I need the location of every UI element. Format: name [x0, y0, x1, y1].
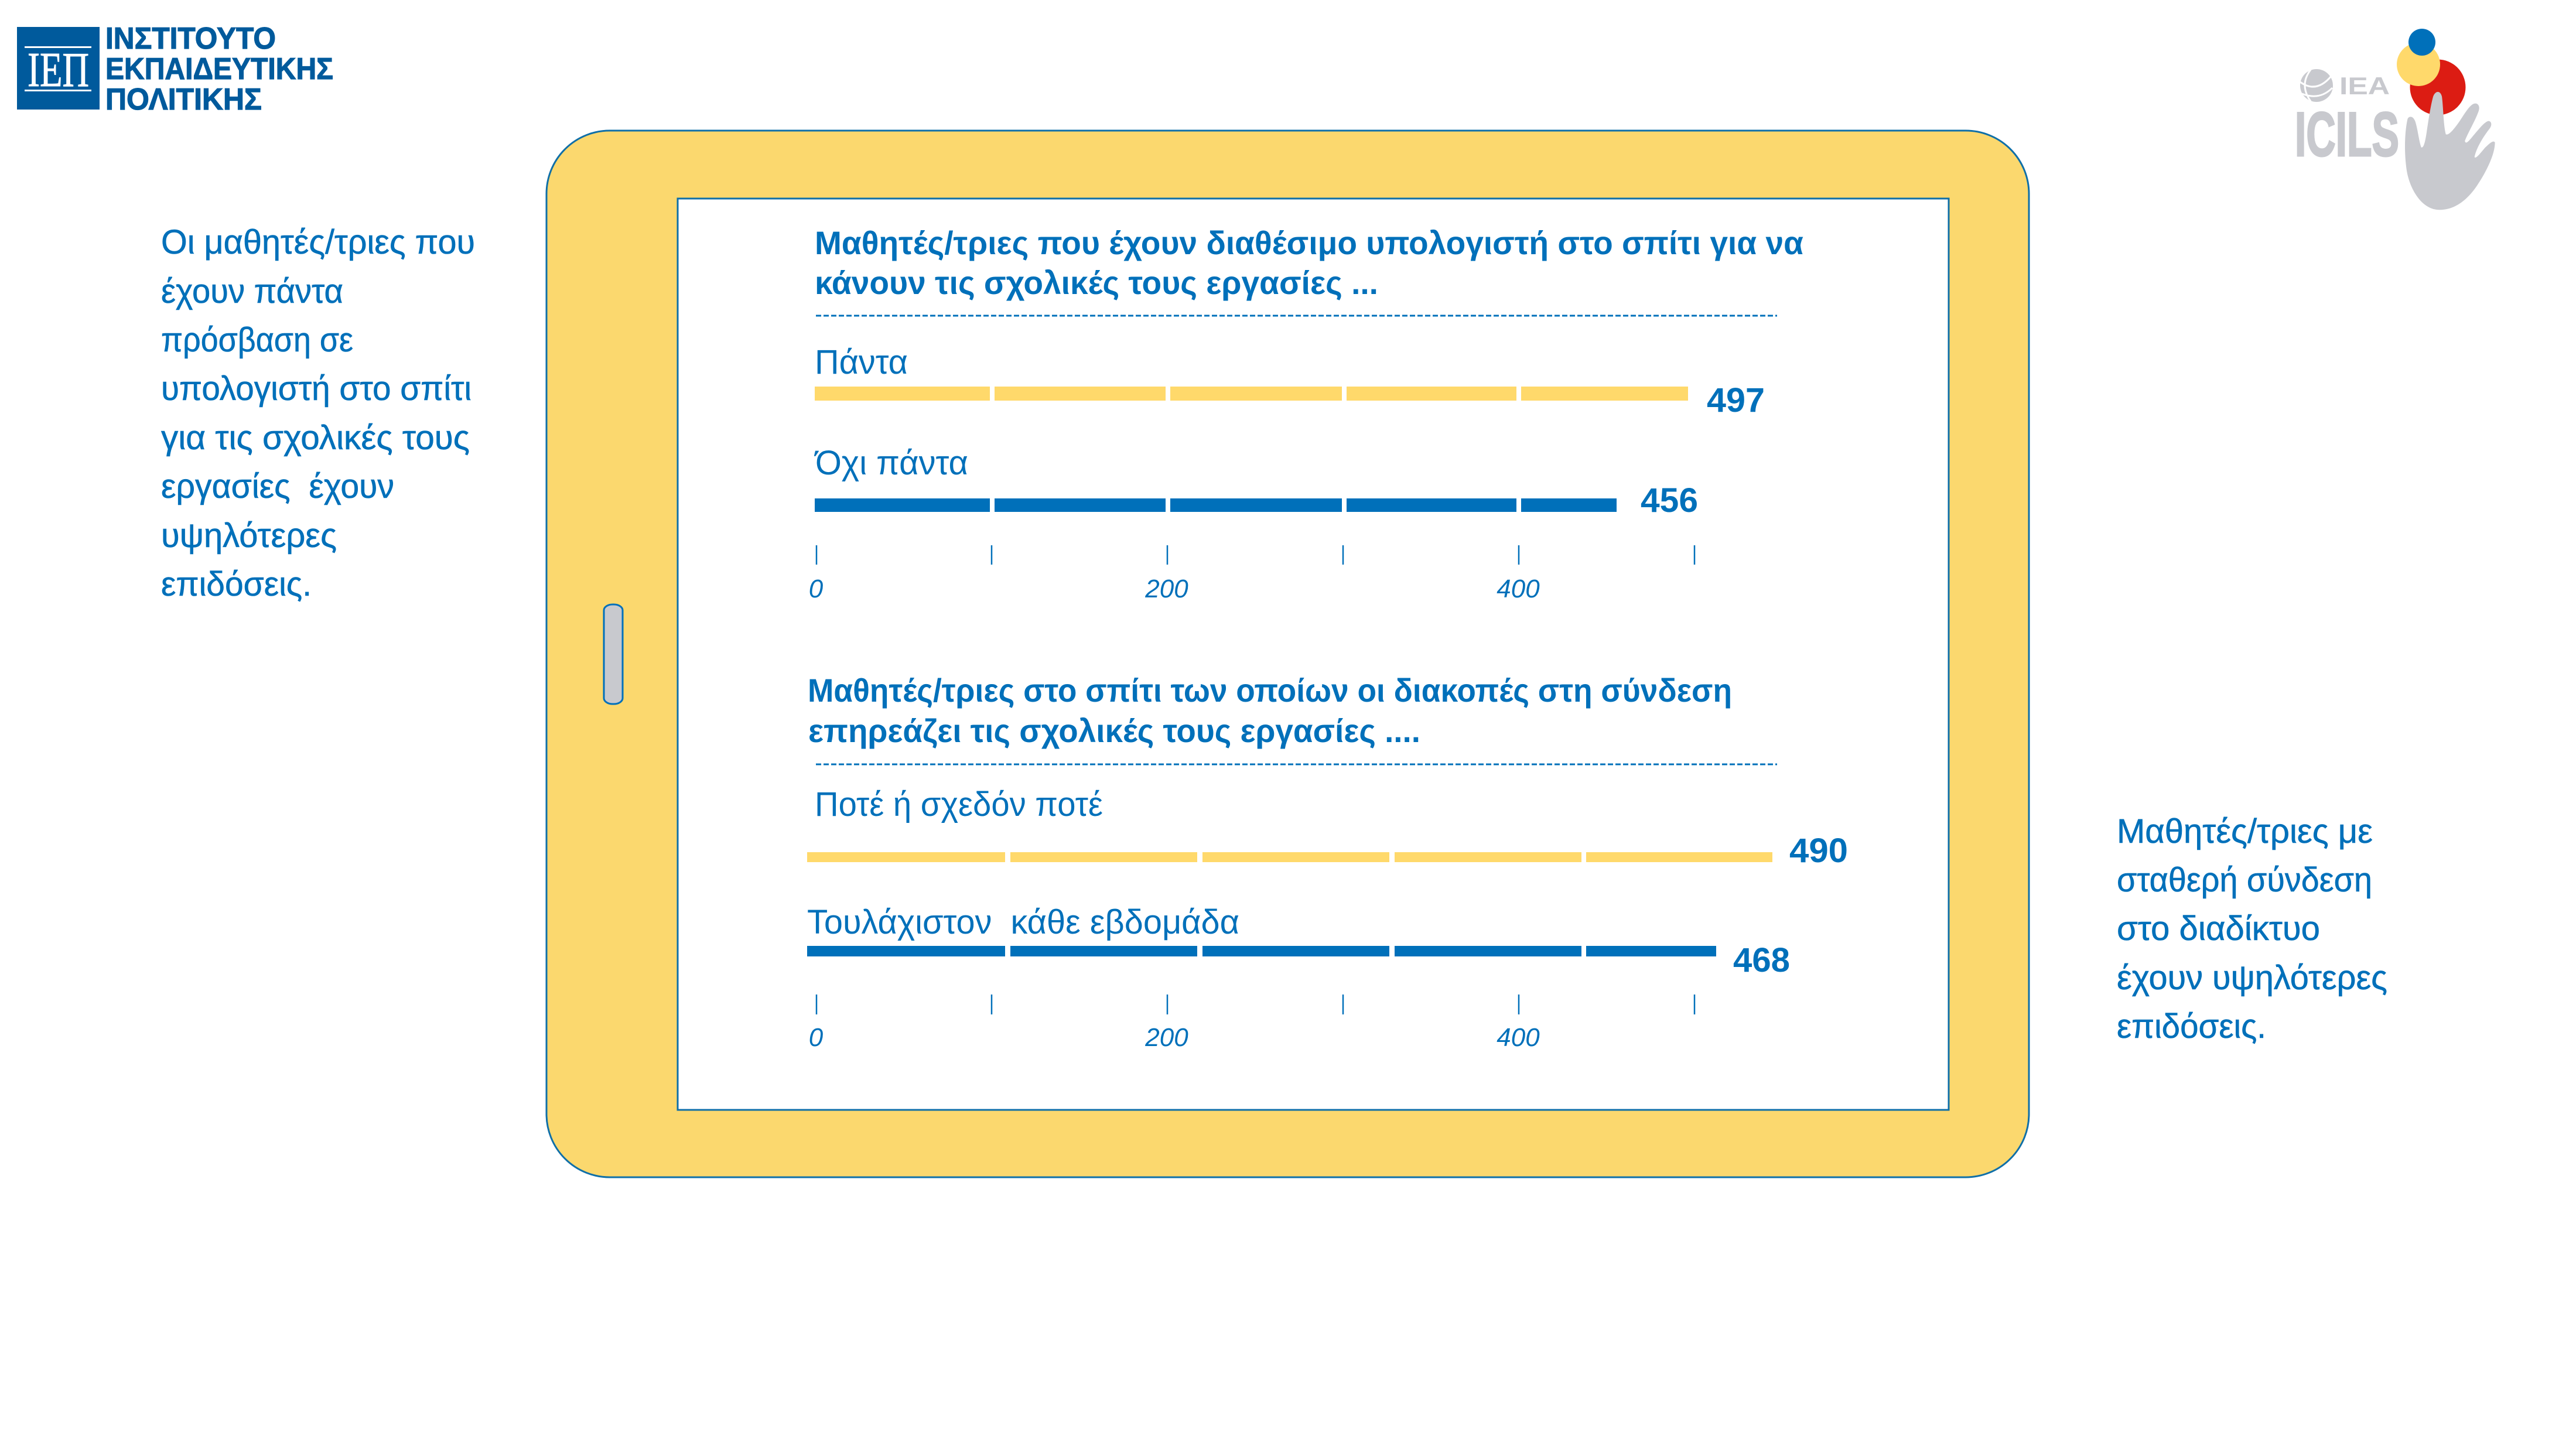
text block: left takeaway: εργασίες έχουν [161, 467, 394, 505]
bar: never or almost never 490 [807, 852, 1772, 862]
tablet body [546, 131, 2029, 1177]
icon: yellow circle [2397, 43, 2440, 86]
logo: IEA ICILS [2295, 29, 2495, 210]
logo wordmark: ΕΚΠΑΙΔΕΥΤΙΚΗΣ [105, 52, 333, 86]
logo emblem square: ΙΕΠ [28, 43, 89, 97]
value: 468: 468 [1733, 941, 1790, 979]
logo wordmark: ΠΟΛΙΤΙΚΗΣ [105, 83, 262, 117]
text block: right takeaway: επιδόσεις. [2117, 1007, 2266, 1045]
chart 2 heading [808, 672, 1732, 749]
axis: chart 2 scale [809, 995, 1694, 1052]
logo emblem square [17, 27, 100, 110]
chart 1 heading: Μαθητές/τριες που έχουν διαθέσιμο υπολογιστή στο σπίτι για να [815, 224, 1803, 261]
chart 2 heading: επηρεάζει τις σχολικές τους εργασίες .... [808, 712, 1420, 749]
text block: left takeaway: επιδόσεις. [161, 565, 312, 603]
text block: left takeaway: Οι μαθητές/τριες που [161, 223, 475, 261]
tablet screen [678, 199, 1949, 1110]
axis: chart 1 scale [809, 545, 1694, 603]
text block: right takeaway: έχουν υψηλότερες [2117, 959, 2387, 997]
axis: chart 1 scale: 0 [809, 575, 824, 603]
axis: chart 2 scale: 400 [1497, 1023, 1540, 1052]
axis: chart 2 scale: 0 [809, 1023, 824, 1052]
value: 490: 490 [1789, 832, 1848, 870]
logo: Institute of Educational Policy [17, 22, 333, 117]
chart 2 heading: Μαθητές/τριες στο σπίτι των οποίων οι διακοπές στη σύνδεση [808, 672, 1732, 709]
bar: not always 456 [815, 498, 1617, 512]
icon: red circle [2410, 60, 2466, 115]
text block: right takeaway [2117, 812, 2387, 1045]
text block: left takeaway: υψηλότερες [161, 517, 337, 555]
text block: left takeaway: για τις σχολικές τους [161, 419, 470, 457]
chart: computer availability at home [809, 224, 1803, 603]
text block: right takeaway: Μαθητές/τριες με [2117, 812, 2373, 850]
icon: IEA globe [2300, 69, 2333, 102]
chart: connection interruptions [807, 672, 1848, 1052]
icon: hand [2405, 92, 2495, 210]
chart 1 heading: κάνουν τις σχολικές τους εργασίες ... [815, 264, 1378, 301]
icon: blue circle [2408, 29, 2435, 56]
bar: at least weekly 468 [807, 946, 1716, 956]
label: not always: Όχι πάντα [814, 444, 968, 482]
text block: right takeaway: σταθερή σύνδεση [2117, 861, 2372, 899]
IEA wordmark: IEA [2339, 72, 2390, 100]
axis: chart 1 scale: 200 [1144, 575, 1188, 603]
text block: right takeaway: στο διαδίκτυο [2117, 910, 2320, 948]
value: 497: 497 [1707, 381, 1765, 419]
label: at least weekly: Τουλάχιστον κάθε εβδομάδα [807, 903, 1239, 941]
chart 1 heading [815, 224, 1803, 301]
label: always: Πάντα [815, 343, 908, 381]
axis: chart 1 scale: 400 [1497, 575, 1540, 603]
panel: tablet [546, 131, 2029, 1177]
axis: chart 2 scale: 200 [1144, 1023, 1188, 1052]
logo wordmark [105, 22, 333, 117]
bar: always 497 [815, 387, 1688, 401]
text block: left takeaway: υπολογιστή στο σπίτι [161, 370, 472, 408]
text block: left takeaway: πρόσβαση σε [161, 321, 353, 359]
ICILS wordmark: ICILS [2295, 99, 2399, 169]
label: never or almost never: Ποτέ ή σχεδόν ποτέ [815, 785, 1103, 823]
text block: left takeaway [161, 223, 475, 603]
logo wordmark: ΙΝΣΤΙΤΟΥΤΟ [105, 22, 276, 56]
tablet home button [604, 604, 623, 704]
text block: left takeaway: έχουν πάντα [161, 272, 343, 310]
value: 456: 456 [1641, 481, 1698, 520]
